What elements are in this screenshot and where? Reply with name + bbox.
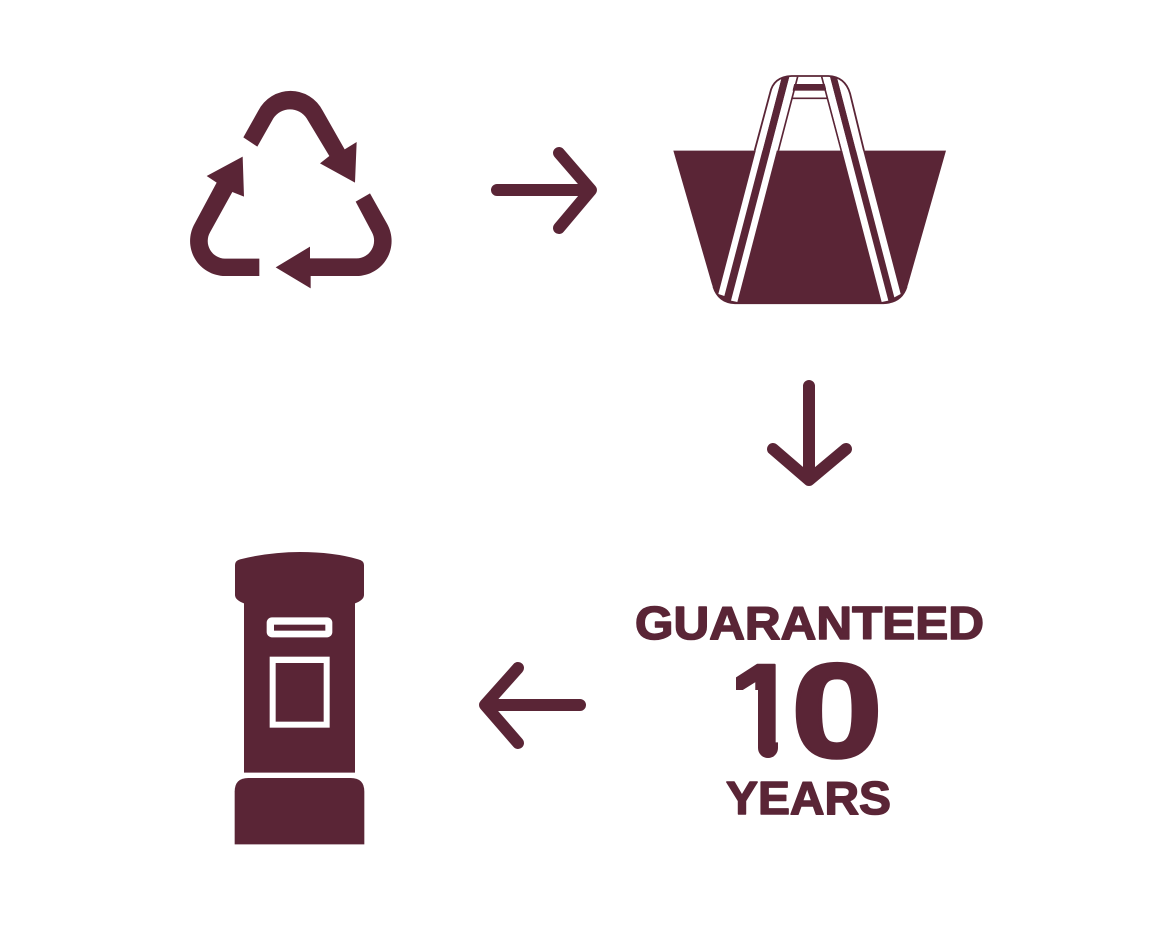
arrow: left to post box (485, 668, 580, 743)
text: guaranteed 10 years: 1 (725, 637, 800, 786)
text: guaranteed 10 years: GUARANTEED (635, 597, 984, 649)
text: guaranteed 10 years (635, 597, 984, 824)
arrow: down to guarantee (773, 386, 846, 480)
arrow: right to bag (497, 153, 591, 228)
icon: tote bag (673, 73, 946, 303)
text: guaranteed 10 years: YEARS (726, 772, 891, 824)
text: guaranteed 10 years: 0 (791, 637, 883, 786)
icon: post box (235, 552, 364, 844)
icon: recycling symbol (190, 91, 392, 288)
